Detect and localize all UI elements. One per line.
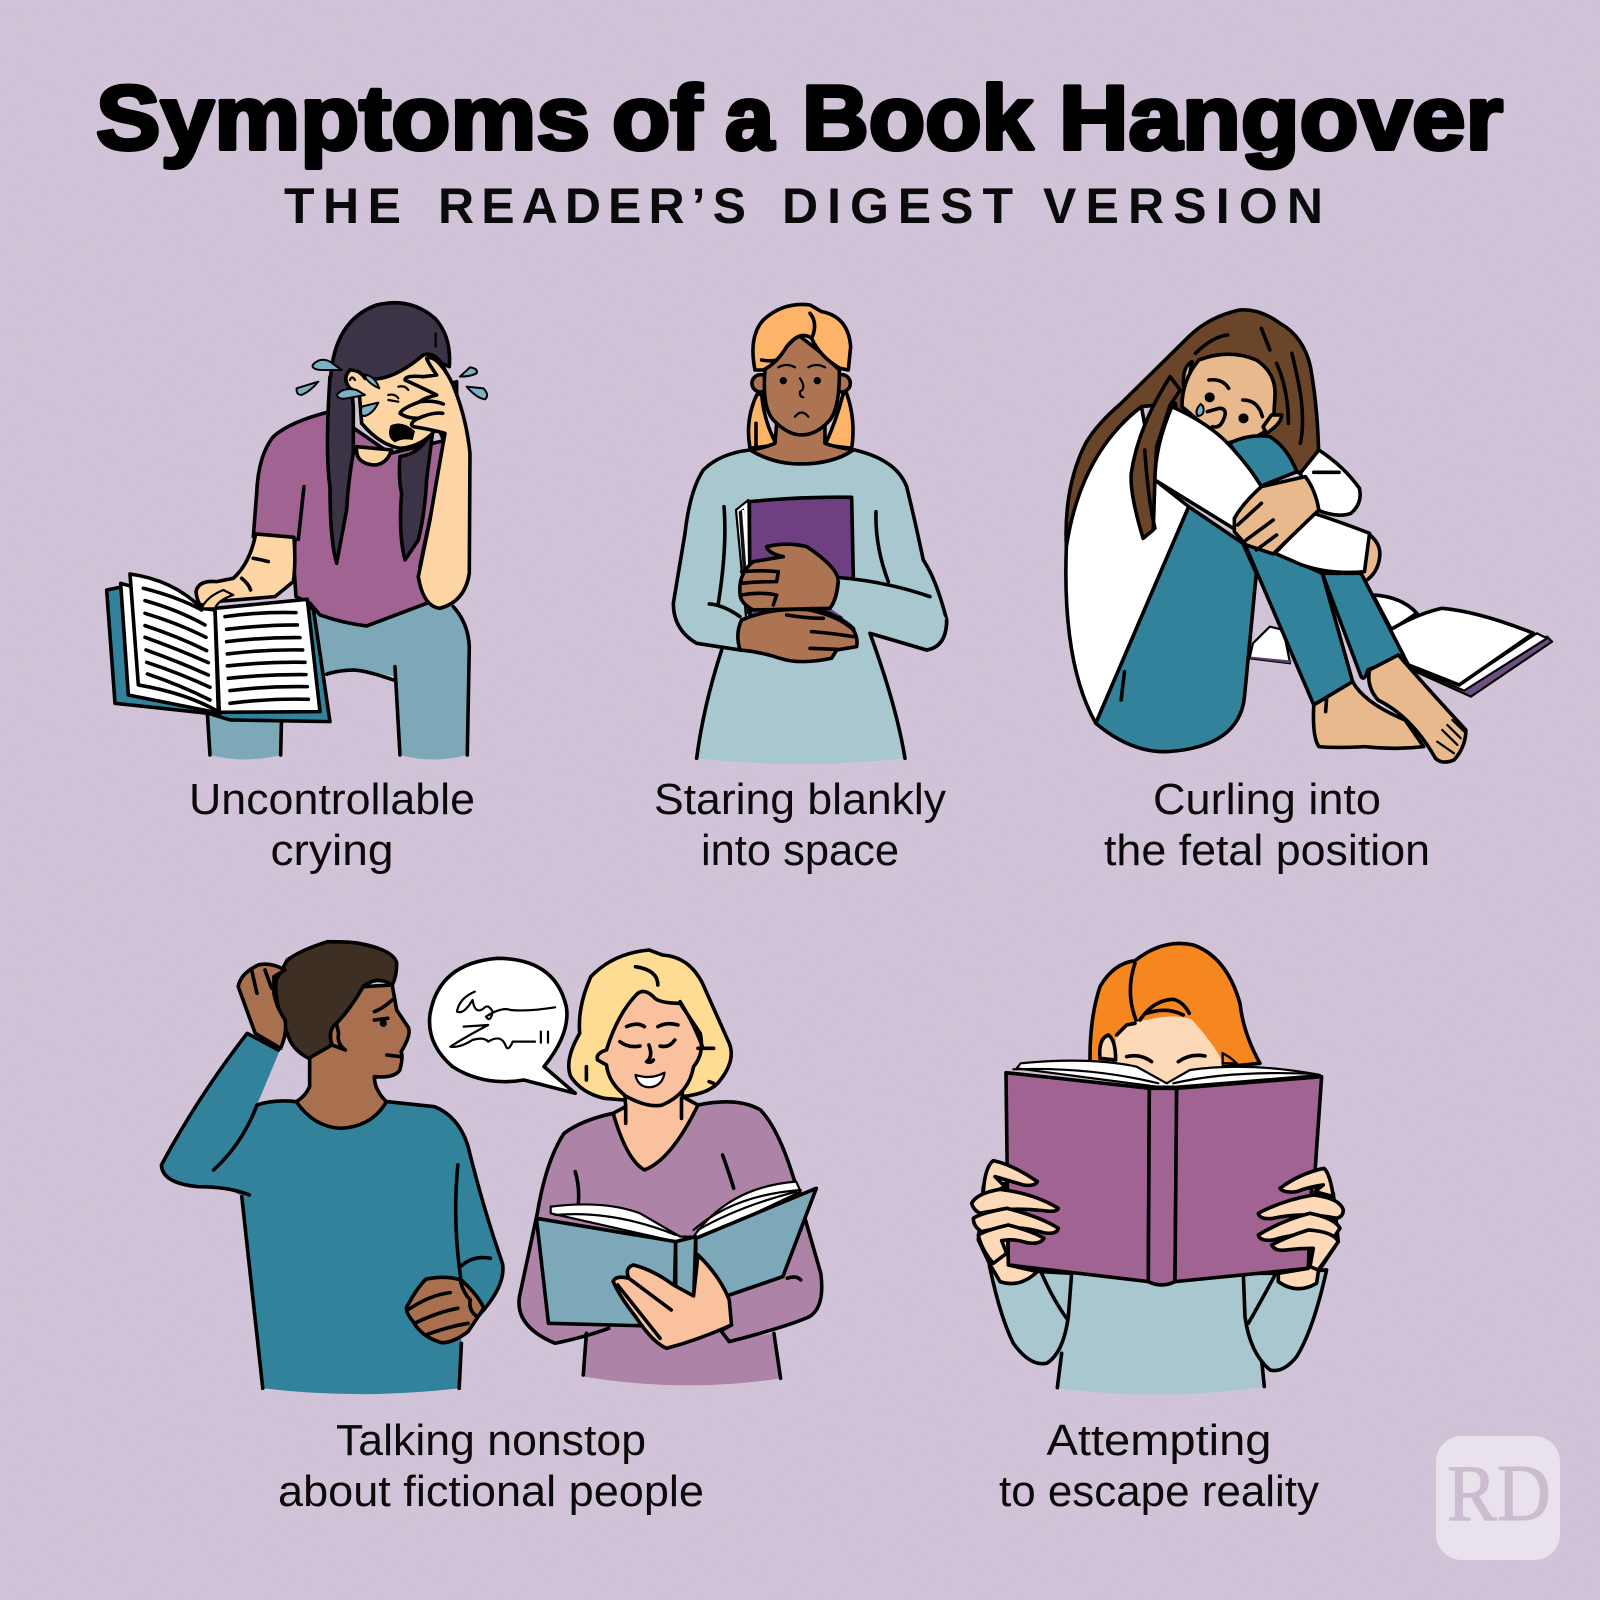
man figure — [161, 942, 503, 1394]
caption: attempting to escape reality: to escape reality — [999, 1467, 1319, 1516]
caption: curling into the fetal position: Curling into — [1153, 775, 1381, 824]
title: Book — [802, 68, 1033, 169]
title: of — [612, 68, 703, 169]
caption: attempting to escape reality: Attempting — [1046, 1416, 1272, 1465]
subtitle — [284, 178, 1323, 234]
caption: staring blankly: Staring blankly — [654, 775, 946, 824]
caption: talking nonstop: about fictional people — [278, 1467, 704, 1516]
caption: staring blankly: into space — [701, 826, 899, 875]
subtitle: THE — [284, 178, 401, 234]
RD logo badge — [1436, 1436, 1560, 1560]
caption: talking nonstop: Talking nonstop — [336, 1416, 646, 1465]
panel: uncontrollable crying — [107, 303, 487, 875]
woman figure — [519, 950, 822, 1385]
title: Symptoms — [96, 68, 590, 169]
subtitle: DIGEST — [782, 178, 1013, 234]
right hand — [1258, 1168, 1343, 1289]
caption: uncontrollable crying — [189, 775, 475, 875]
subtitle: READER’S — [438, 178, 746, 234]
title — [96, 68, 1503, 169]
caption: uncontrollable crying: Uncontrollable — [189, 775, 475, 824]
subtitle: VERSION — [1043, 178, 1323, 234]
caption: uncontrollable crying: crying — [270, 826, 394, 875]
caption: curling into the fetal position — [1104, 775, 1430, 875]
title: Hangover — [1059, 68, 1503, 169]
panel: talking nonstop — [161, 942, 822, 1516]
panel: staring blankly — [654, 304, 947, 875]
RD logo badge: RD — [1447, 1450, 1551, 1538]
caption: attempting to escape reality — [999, 1416, 1319, 1516]
caption: staring blankly — [654, 775, 946, 875]
illustration: woman holding book staring — [673, 304, 947, 764]
illustration: man and woman talking — [161, 942, 822, 1394]
speech bubble with scribbled text — [430, 958, 575, 1093]
left hand — [972, 1161, 1058, 1284]
illustration: crying woman with open book — [107, 303, 487, 759]
illustration: person hiding behind purple book — [972, 943, 1343, 1395]
caption: curling into the fetal position: the fetal position — [1104, 826, 1430, 875]
title: a — [725, 68, 775, 169]
panel: attempting to escape reality — [972, 943, 1343, 1516]
illustration: woman curled up beside book — [1066, 310, 1552, 762]
panel: curling into the fetal position — [1066, 310, 1552, 875]
caption: talking nonstop — [278, 1416, 704, 1516]
